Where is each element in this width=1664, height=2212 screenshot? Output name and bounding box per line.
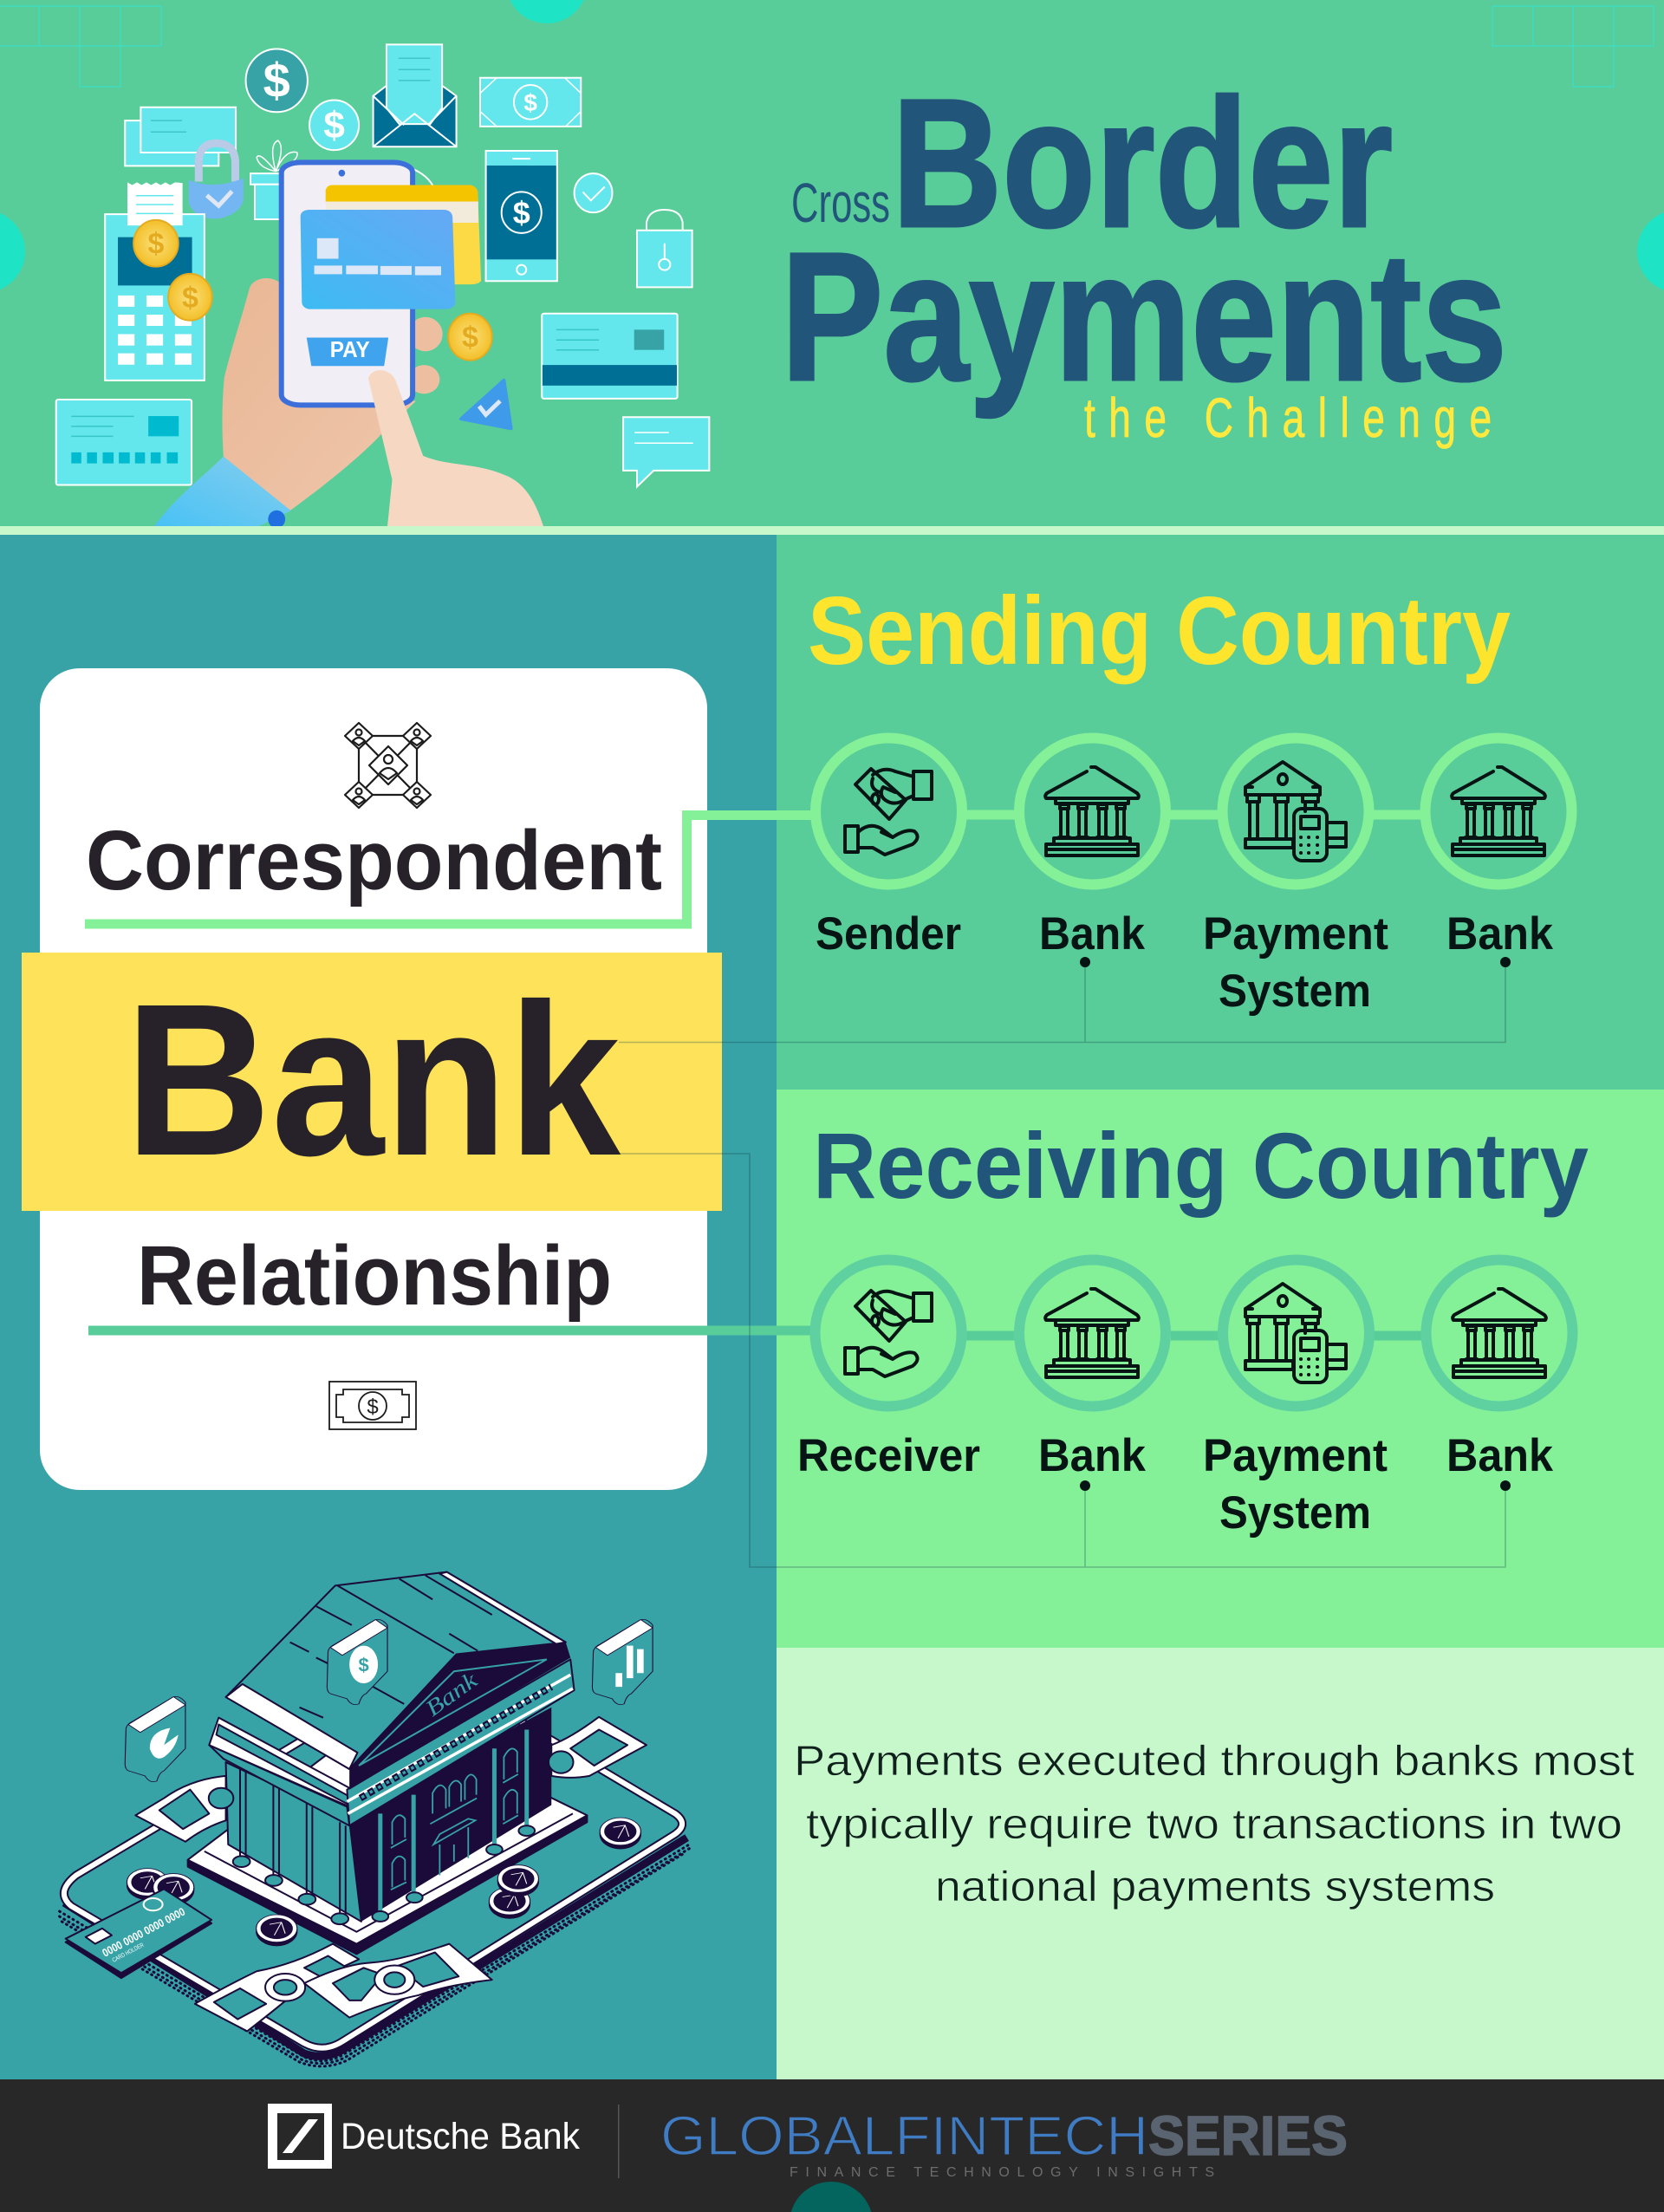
- connector: sending country to correspondent line: [85, 815, 815, 924]
- icon: gold coins: $: [182, 282, 198, 315]
- icon: check badge: [575, 173, 612, 212]
- illustration: hand holding phone with payment icons: [56, 44, 709, 528]
- icon: network of people: [345, 723, 431, 808]
- illustration: phone: [282, 162, 413, 405]
- step: receiving payment system: System: [1219, 1487, 1371, 1539]
- icon: banknote outline: [329, 1382, 416, 1429]
- panel: receiving country background: [777, 1090, 1664, 1648]
- step: receiver: [797, 1260, 980, 1481]
- icon: banknote outline: $: [367, 1396, 379, 1419]
- logo: Global Fintech Series: [660, 2105, 1348, 2180]
- subtitle: the Challenge: the Challenge: [1084, 387, 1492, 449]
- icon: dark dollar coin: [246, 49, 308, 112]
- bank left cornice: [209, 1718, 349, 1825]
- label: card holder: CARD HOLDER: [112, 1942, 145, 1964]
- heading: Sending Country: Sending Country: [808, 577, 1511, 685]
- logo: Global Fintech Series: FINANCE TECHNOLOGY INSIGHTS: [790, 2165, 1214, 2180]
- illustration: pointing finger: [368, 370, 543, 526]
- icon: banknote: $: [523, 89, 537, 116]
- step: receiver: Receiver: [797, 1430, 980, 1481]
- flow: sending country steps: [816, 738, 1572, 1017]
- icon: envelope with letter: [374, 44, 457, 146]
- icon: light dollar coin: $: [323, 104, 345, 146]
- step: receiving correspondent bank: Bank: [1446, 1430, 1553, 1481]
- icon: gold coins: $: [147, 228, 164, 261]
- step: sender: [816, 738, 962, 960]
- divider: [618, 2105, 619, 2178]
- icon: speech bubble: [623, 417, 709, 486]
- button: pay: [307, 336, 388, 366]
- logo: Global Fintech Series: SERIES: [1148, 2105, 1348, 2167]
- heading: Receiving Country: Receiving Country: [813, 1113, 1589, 1218]
- panel: sending country background: [777, 535, 1664, 1090]
- logo: Global Fintech Series: GLOBALFINTECH: [660, 2105, 1148, 2167]
- icon: gift box: [250, 140, 297, 219]
- bank left colonnade: [226, 1762, 361, 1924]
- flow: receiving country steps: [797, 1260, 1572, 1539]
- icon: phone with dollar: [486, 151, 557, 281]
- illustration: yellow card: [326, 185, 481, 284]
- icon: document cards: [125, 107, 236, 166]
- step: receiving payment system: Payment: [1203, 1430, 1388, 1481]
- icon: banknote: [480, 78, 581, 127]
- icon: light dollar coin: [309, 100, 359, 150]
- connector: bank to sending banks: [619, 962, 1505, 1042]
- connector: bank to receiving banks: [619, 1154, 1505, 1567]
- illustration: hand palm: [222, 278, 443, 511]
- text block: explanation: Payments executed through banks most: [794, 1738, 1635, 1785]
- label: bank sign on pediment: Bank: [420, 1667, 482, 1721]
- phone body: [64, 1671, 687, 2056]
- icon: dark dollar coin: $: [263, 53, 290, 107]
- icon: globe arc: [401, 166, 433, 186]
- icon: credit card left: [56, 400, 192, 485]
- title: Payments: Payments: [781, 214, 1507, 419]
- banknotes: [135, 1717, 647, 2031]
- bank front entablature: [347, 1659, 575, 1825]
- bank base plate: [188, 1714, 587, 1954]
- icon: dollar speech square: $: [358, 1654, 369, 1675]
- step: sending correspondent bank: Bank: [1446, 908, 1553, 960]
- logo: Deutsche Bank: [268, 2104, 580, 2169]
- bank front facade: [349, 1708, 551, 1922]
- step: receiving bank: [1019, 1260, 1166, 1491]
- illustration: blue card: [301, 210, 455, 309]
- icon: padlock: [189, 143, 244, 218]
- step: receiving correspondent bank: [1427, 1260, 1572, 1491]
- title: [781, 61, 1507, 449]
- text block: explanation: national payments systems: [935, 1864, 1495, 1910]
- icon: dollar speech square: [327, 1619, 387, 1705]
- step: receiving payment system: [1203, 1260, 1388, 1539]
- icon: pie speech square: [125, 1696, 185, 1782]
- button: pay: PAY: [330, 336, 370, 362]
- background: left teal column: [0, 535, 777, 2079]
- illustration: sleeve: [154, 457, 291, 528]
- bank card: [66, 1889, 211, 1978]
- step: sending bank: [1019, 738, 1166, 967]
- step: sending payment system: Payment: [1203, 908, 1388, 960]
- step: receiving bank: Bank: [1038, 1430, 1146, 1481]
- heading: Relationship: Relationship: [137, 1228, 612, 1323]
- label: card number: 0000 0000 0000 0000: [100, 1905, 187, 1960]
- icon: gold coins: [133, 220, 492, 361]
- icon: credit card right: [542, 314, 678, 399]
- icon: blue check triangle: [461, 381, 511, 428]
- card: correspondent bank relationship: [40, 668, 707, 1490]
- divider strip: [0, 526, 1664, 535]
- icon: gold coins: $: [462, 322, 478, 355]
- step: sending payment system: [1203, 738, 1388, 1017]
- title: Cross: Cross: [791, 172, 890, 234]
- text block: explanation: [794, 1738, 1635, 1910]
- step: sending payment system: System: [1219, 966, 1371, 1017]
- panel: explanation background: [777, 1648, 1664, 2079]
- footer: [0, 2079, 1664, 2212]
- heading: Correspondent: Correspondent: [86, 813, 662, 908]
- banner: Bank: Bank: [125, 959, 621, 1200]
- step: sending correspondent bank: [1425, 738, 1572, 967]
- background: header band: [0, 0, 1664, 527]
- icon: shopping bag: [637, 210, 692, 287]
- title: Border: Border: [892, 61, 1393, 265]
- icon: phone with dollar: $: [513, 195, 530, 231]
- logo: Deutsche Bank: Deutsche Bank: [341, 2116, 580, 2157]
- bank roof: [226, 1572, 566, 1769]
- step: sending bank: Bank: [1039, 908, 1145, 960]
- icon: card terminal: [105, 182, 205, 381]
- bank pediment: [349, 1643, 570, 1790]
- illustration: isometric bank on a phone: [60, 1572, 689, 2066]
- text block: explanation: typically require two transactions in two: [806, 1801, 1622, 1848]
- decorative half circle: [790, 2182, 873, 2212]
- connector: receiving country to relationship line: [88, 1326, 815, 1335]
- coins: [127, 1818, 640, 1946]
- icon: chart speech square: [592, 1619, 653, 1705]
- phone halftone shadow: [60, 1844, 689, 2066]
- step: sender: Sender: [816, 908, 961, 960]
